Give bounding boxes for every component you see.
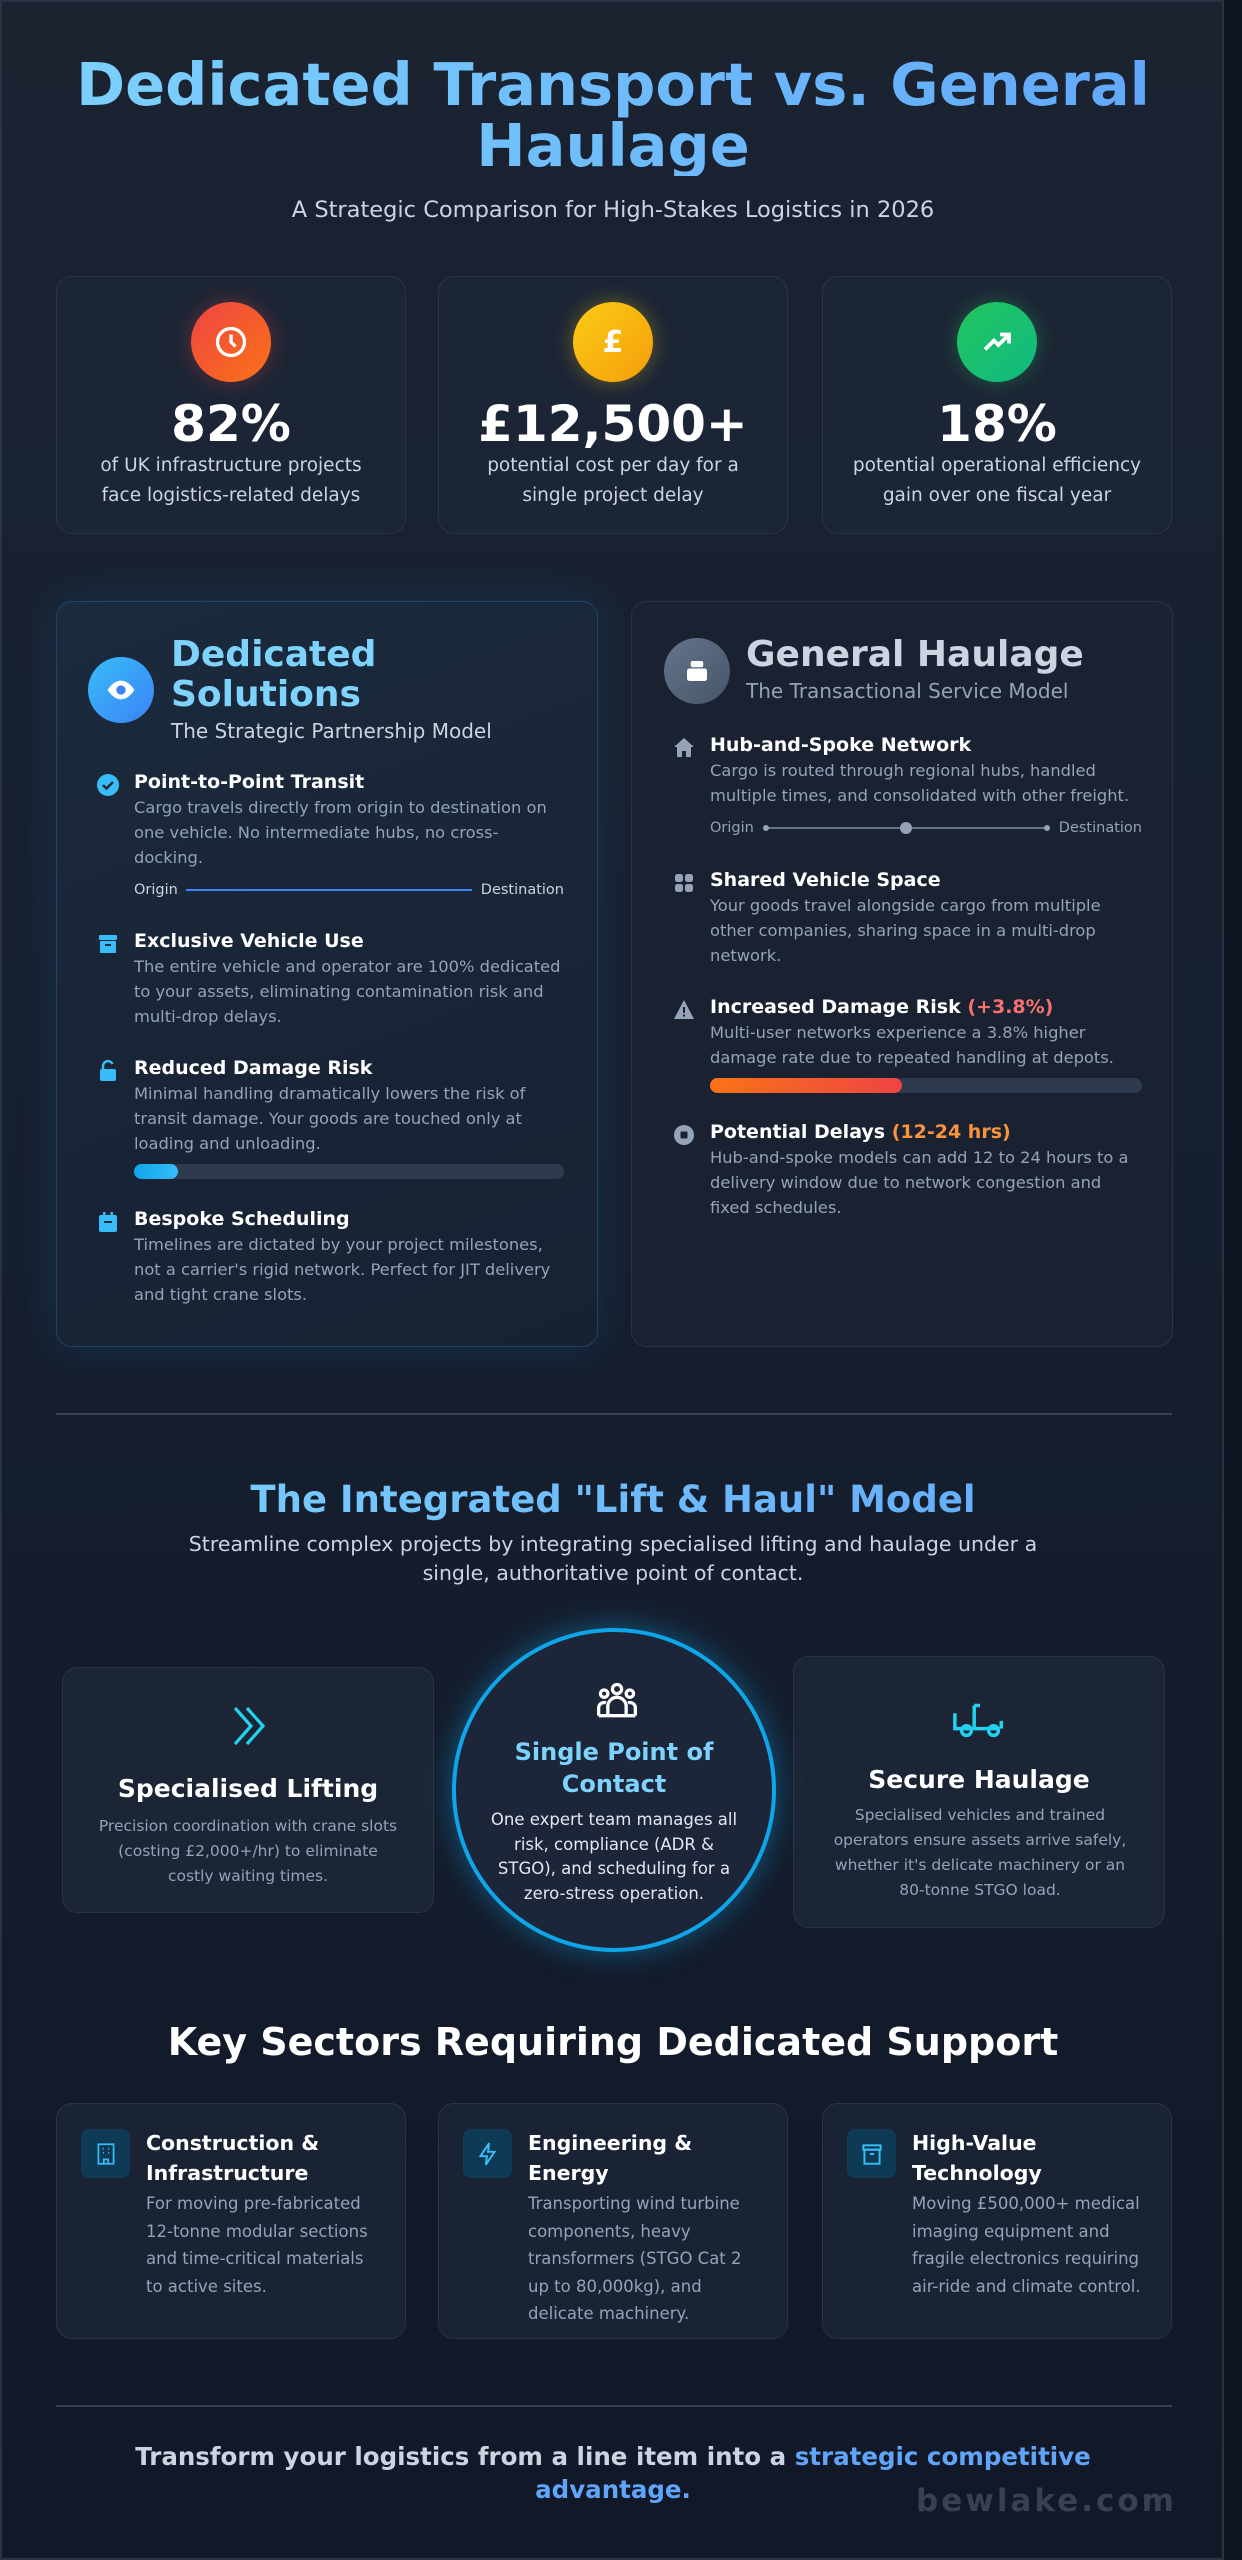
item: point-to-point: Point-to-Point Transit [134,771,364,793]
item: point-to-point: Origin [134,882,178,898]
sector: technology [822,2103,1172,2339]
item: hub and spoke [674,734,1142,836]
subtitle: A Strategic Comparison for High-Stakes Logistics in 2026 [292,197,934,223]
item: reduced damage: Reduced Damage Risk [134,1057,372,1079]
icon: eye [88,657,154,723]
item: exclusive: The entire vehicle and operator are 100% dedicated to your assets, eliminating contamination risk and multi-drop delays. [134,957,560,1026]
item: increased damage: Multi-user networks experience a 3.8% higher damage rate due to repeated handling at depots. [710,1023,1114,1067]
icon: truck [953,1704,1003,1738]
item: shared space: Your goods travel alongside cargo from multiple other companies, sharing space in a multi-drop network. [710,896,1101,965]
item: hub and spoke: Destination [1059,820,1142,836]
stat card: cost: single project delay [522,485,704,506]
item: shared space [675,869,1101,965]
item: shared space: Shared Vehicle Space [710,869,941,891]
title: Haulage [476,111,750,180]
stat card: 18%: 18% [937,395,1057,453]
stat card: 18% [822,276,1172,534]
text: lift & haul intro: Streamline complex projects by integrating specialised lifting and haulage under a single, authoritative point of contact. [189,1532,1037,1585]
item: point-to-point [97,771,564,898]
card: secure haulage: Secure Haulage [868,1765,1090,1794]
item: reduced damage [100,1057,564,1179]
sector: technology: High-Value Technology [912,2131,1042,2185]
sector: technology: Moving £500,000+ medical imaging equipment and fragile electronics requiring air-ride and climate control. [912,2194,1141,2296]
item: potential delays: Potential Delays (12-24 hrs) [710,1121,1011,1143]
item: reduced damage: Minimal handling dramatically lowers the risk of transit damage. Your goods are touched only at loading and unloading. [134,1084,525,1153]
circle: single point of contact: Single Point of Contact [515,1738,713,1798]
icon: trend up [957,302,1037,382]
icon: money [573,302,653,382]
item: potential delays [674,1121,1128,1217]
stat card: 82%: face logistics-related delays [102,485,360,506]
icon: team [597,1682,637,1718]
circle: single point of contact [452,1628,776,1952]
item: exclusive: Exclusive Vehicle Use [134,930,364,952]
heading: key sectors: Key Sectors Requiring Dedicated Support [168,2020,1058,2064]
heading: Dedicated [171,634,376,675]
panel: general haulage: The Transactional Service Model [746,679,1068,703]
card: specialised lifting: Precision coordination with crane slots (costing £2,000+/hr) to eliminate costly waiting times. [99,1817,397,1885]
icon: chevrons [234,1706,265,1746]
heading: Solutions [171,674,361,715]
circle: single point of contact: One expert team manages all risk, compliance (ADR & STGO), and scheduling for a zero-stress operation. [491,1810,737,1902]
heading: lift & haul [2,1478,1224,1522]
item: bespoke [99,1208,550,1304]
icon: clock [191,302,271,382]
stat card: 18%: gain over one fiscal year [883,485,1111,506]
item: hub and spoke: Hub-and-Spoke Network [710,734,971,756]
item: increased damage [674,996,1142,1093]
icon: archive [847,2129,896,2178]
footer callout: Transform your logistics from a line item into a strategic competitive advantage. [135,2442,1091,2504]
icon: calendar [99,1212,117,1232]
item: bespoke: Timelines are dictated by your project milestones, not a carrier's rigid network. Perfect for JIT delivery and tight crane slots. [134,1235,550,1304]
item: hub and spoke: Origin [710,820,754,836]
sector: engineering [438,2103,788,2339]
watermark: bewlake.com [916,2483,1177,2519]
item: potential delays: Hub-and-spoke models can add 12 to 24 hours to a delivery window due to network congestion and fixed schedules. [710,1148,1128,1217]
item: increased damage: Increased Damage Risk (+3.8%) [710,996,1053,1018]
item: exclusive [99,930,560,1026]
sector: construction [56,2103,406,2339]
card: secure haulage [793,1656,1165,1928]
stat card: 82% [56,276,406,534]
item: point-to-point: Destination [481,882,564,898]
item: hub and spoke: Cargo is routed through regional hubs, handled multiple times, and consolidated with other freight. [710,761,1129,805]
icon: lock [100,1060,116,1081]
panel: dedicated solutions: The Strategic Partnership Model [171,719,492,743]
icon: warning [674,1000,694,1019]
card: secure haulage: Specialised vehicles and trained operators ensure assets arrive safely, whether it's delicate machinery or an 80‑tonne STGO load. [834,1806,1126,1899]
title [2,54,1224,176]
icon: stack [664,638,730,704]
heading [171,634,376,715]
icon: stop [674,1125,694,1145]
panel: dedicated solutions [56,601,598,1347]
sector: construction: Construction & Infrastructure [146,2131,319,2185]
icon: money: £ [603,324,623,360]
item: bespoke: Bespoke Scheduling [134,1208,350,1230]
panel: general haulage [631,601,1173,1347]
stat card: cost [438,276,788,534]
stat card: 18%: potential operational efficiency [853,455,1141,476]
icon: house [674,738,694,757]
stat card: cost: £12,500+ [478,395,748,453]
item: point-to-point: Cargo travels directly from origin to destination on one vehicle. No intermediate hubs, no cross-docking. [134,798,547,867]
sector: construction: For moving pre-fabricated 12-tonne modular sections and time-critical materials to active sites. [146,2194,368,2296]
icon: check [97,774,119,796]
title: Dedicated Transport vs. General [76,50,1150,119]
stat card: cost: potential cost per day for a [487,455,739,476]
sector: engineering: Engineering & Energy [528,2131,692,2185]
icon: box [99,935,117,953]
heading: General Haulage [746,634,1084,675]
card: specialised lifting [62,1667,434,1913]
stat card: 82%: 82% [171,395,291,453]
card: specialised lifting: Specialised Lifting [118,1774,378,1803]
sector: engineering: Transporting wind turbine components, heavy transformers (STGO Cat 2 up to 80,000kg), and delicate machinery. [528,2194,742,2323]
icon: building [81,2129,130,2178]
stat card: 82%: of UK infrastructure projects [100,455,362,476]
icon: bolt [463,2129,512,2178]
heading: lift & haul: The Integrated "Lift & Haul" Model [250,1478,976,1521]
icon: grid [675,874,693,892]
